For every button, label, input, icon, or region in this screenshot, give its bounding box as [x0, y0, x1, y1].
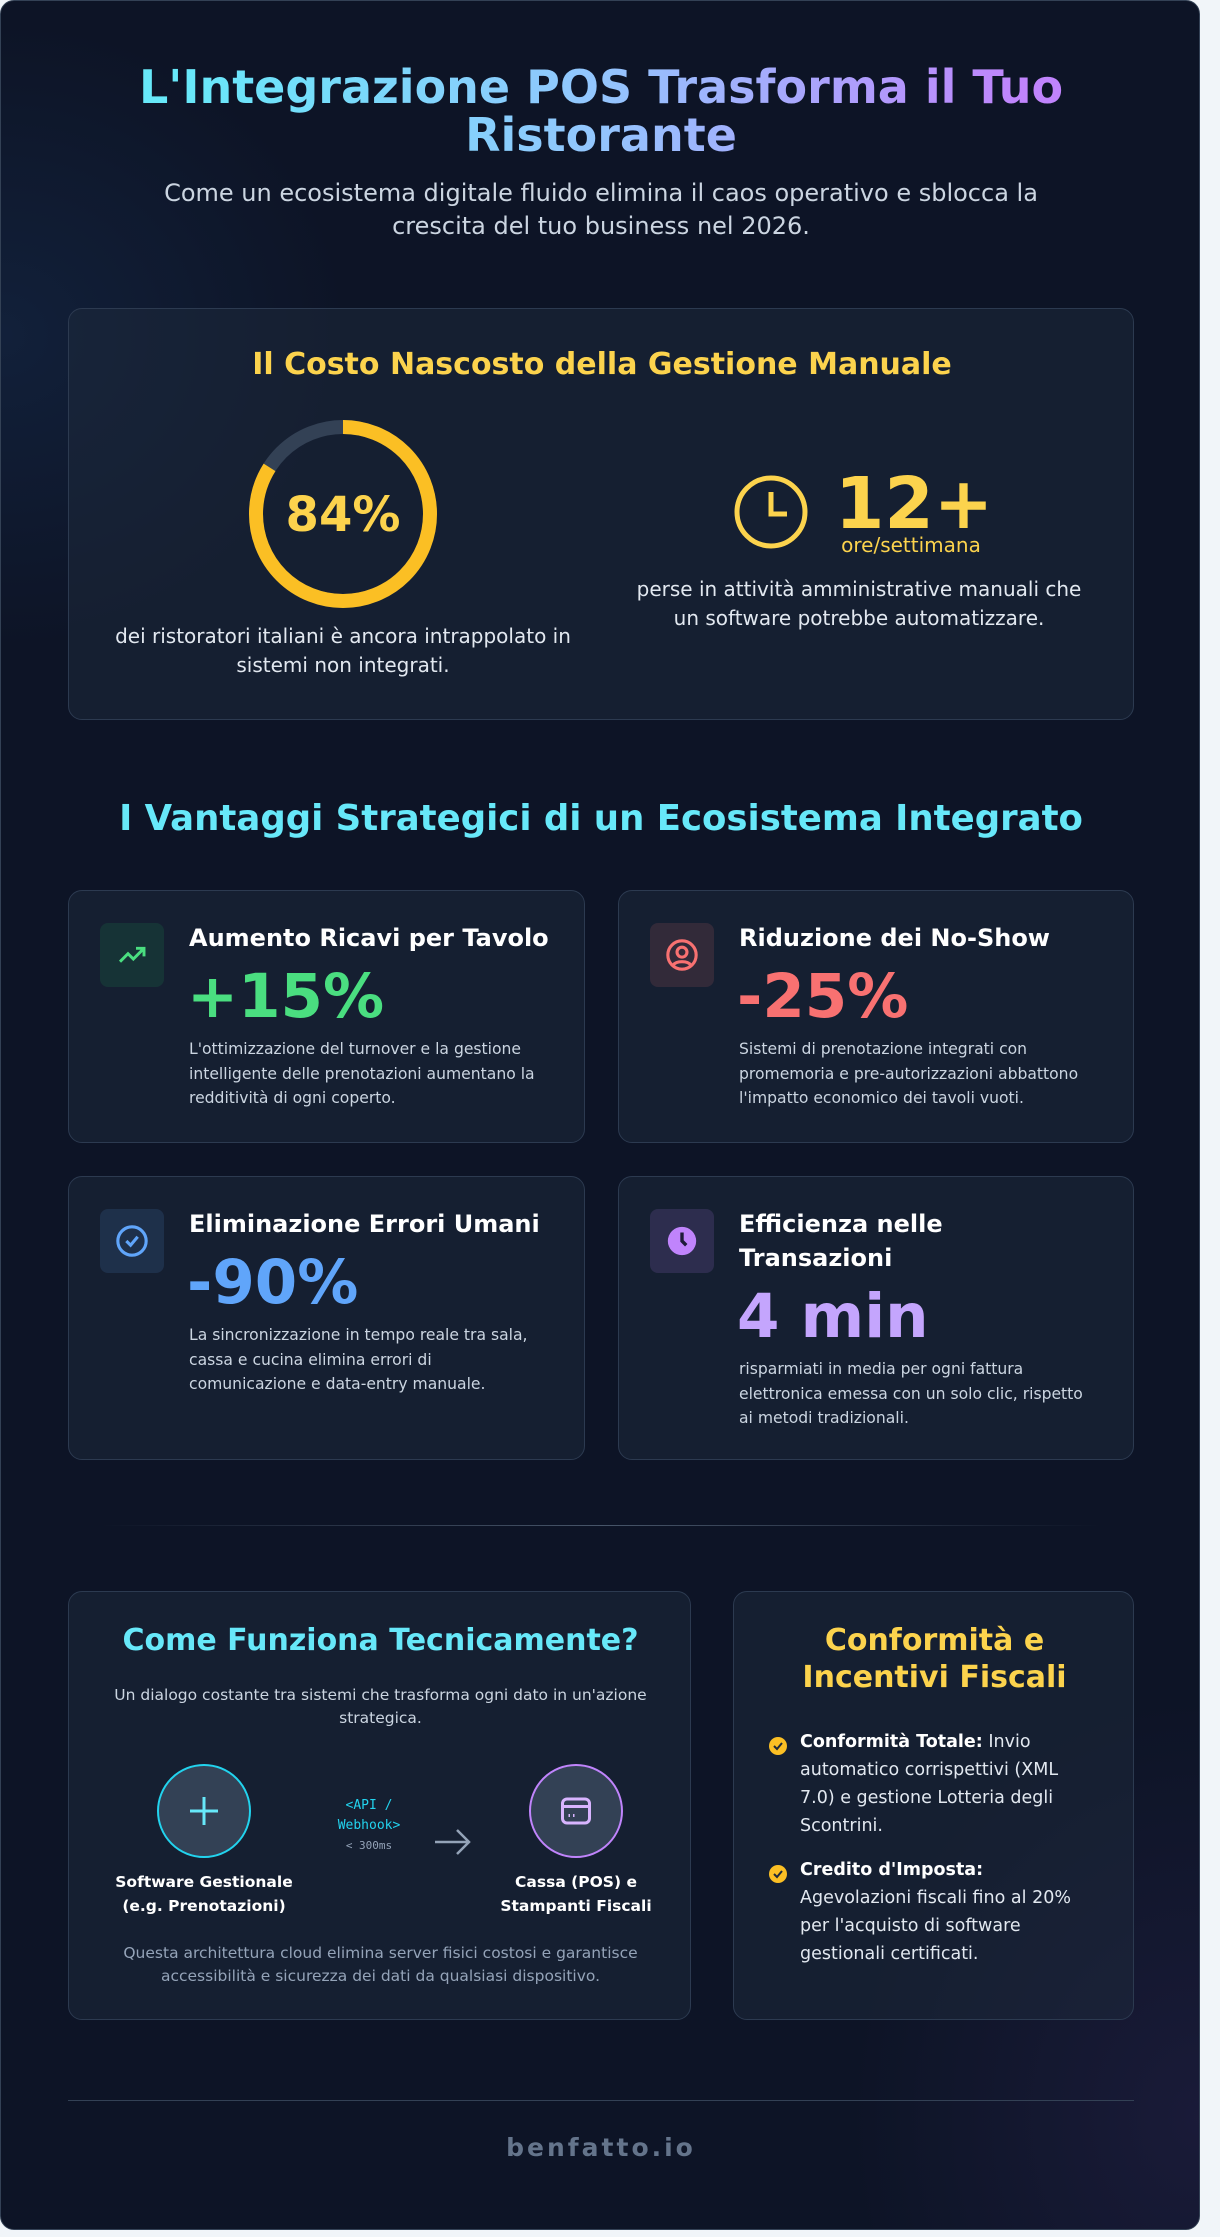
heading	[802, 1623, 1067, 1695]
api label: <API /	[346, 1798, 392, 1813]
card title: Riduzione dei No-Show	[739, 924, 1050, 952]
stat: -90%	[187, 1247, 358, 1318]
panel: hidden cost	[68, 308, 1134, 720]
donut chart 84%	[249, 420, 437, 608]
title	[1, 63, 1201, 159]
node: POS: Cassa (POS) e	[515, 1873, 637, 1891]
donut caption: dei ristoratori italiani è ancora intrappolato in	[115, 624, 571, 648]
heading: Conformità e	[825, 1623, 1044, 1658]
card title	[739, 1210, 943, 1272]
card: no-show	[618, 890, 1134, 1143]
icon: clock	[734, 476, 808, 548]
api label	[338, 1798, 400, 1852]
icon: trend	[100, 923, 164, 987]
heading: Come Funziona Tecnicamente?	[122, 1623, 639, 1658]
subtitle	[164, 179, 1038, 240]
description: L'ottimizzazione del turnover e la gestione intelligente delle prenotazioni aumentano la redditività di ogni coperto.	[189, 1040, 535, 1107]
arrow	[435, 1829, 471, 1855]
description: Sistemi di prenotazione integrati con promemoria e pre-autorizzazioni abbattono l'impatto economico dei tavoli vuoti.	[739, 1040, 1078, 1107]
node: software	[115, 1764, 293, 1915]
node: POS: Stampanti Fiscali	[500, 1897, 652, 1915]
card: ricavi	[68, 890, 585, 1143]
node: software: Software Gestionale	[115, 1873, 293, 1891]
description: risparmiati in media per ogni fattura elettronica emessa con un solo clic, rispetto ai metodi tradizionali.	[739, 1360, 1083, 1427]
description: La sincronizzazione in tempo reale tra sala, cassa e cucina elimina errori di comunicazione e data-entry manuale.	[189, 1326, 528, 1393]
icon: user	[650, 923, 714, 987]
api label: < 300ms	[346, 1839, 392, 1852]
stat 12+: 12+	[835, 462, 993, 545]
hours caption: perse in attività amministrative manuali che	[637, 577, 1081, 601]
icon: check	[100, 1209, 164, 1273]
subtitle: crescita del tuo business nel 2026.	[392, 212, 810, 240]
footer brand: benfatto.io	[506, 2133, 696, 2162]
title: L'Integrazione POS Trasforma il Tuo	[139, 60, 1063, 114]
donut caption: sistemi non integrati.	[236, 653, 450, 677]
donut chart 84%: 84%	[286, 487, 400, 543]
icon: clock	[650, 1209, 714, 1273]
donut caption	[115, 624, 571, 677]
subtext: Un dialogo costante tra sistemi che trasforma ogni dato in un'azione strategica.	[114, 1686, 647, 1727]
stat: +15%	[187, 961, 384, 1032]
node: POS	[500, 1764, 652, 1915]
card: transazioni	[618, 1176, 1134, 1460]
hours caption: un software potrebbe automatizzare.	[674, 606, 1044, 630]
footnote: Questa architettura cloud elimina server fisici costosi e garantisce accessibilità e sicurezza dei dati da qualsiasi dispositivo.	[123, 1944, 638, 1985]
node: software: (e.g. Prenotazioni)	[122, 1897, 286, 1915]
section heading: I Vantaggi Strategici di un Ecosistema Integrato	[119, 798, 1083, 839]
bullet 2: Credito d'Imposta: Agevolazioni fiscali fino al 20% per l'acquisto di software gestionali certificati.	[800, 1860, 1071, 1964]
card title: Efficienza nelle	[739, 1210, 943, 1238]
panel: technical	[68, 1591, 691, 2020]
panel: fiscal	[733, 1591, 1134, 2020]
card: errori	[68, 1176, 585, 1460]
subtitle: Come un ecosistema digitale fluido elimina il caos operativo e sblocca la	[164, 179, 1038, 207]
heading: Incentivi Fiscali	[802, 1660, 1067, 1695]
panel heading: Il Costo Nascosto della Gestione Manuale	[252, 347, 952, 382]
unit: ore/settimana	[841, 533, 981, 557]
card title: Aumento Ricavi per Tavolo	[189, 924, 549, 952]
hours caption	[637, 577, 1081, 630]
stat: -25%	[737, 961, 908, 1032]
api label: Webhook>	[338, 1818, 400, 1833]
card title: Eliminazione Errori Umani	[189, 1210, 540, 1238]
card title: Transazioni	[739, 1244, 892, 1272]
title: Ristorante	[465, 108, 737, 162]
stat: 4 min	[737, 1281, 929, 1352]
bullet 1: Conformità Totale: Invio automatico corrispettivi (XML 7.0) e gestione Lotteria degli Scontrini.	[800, 1732, 1058, 1836]
